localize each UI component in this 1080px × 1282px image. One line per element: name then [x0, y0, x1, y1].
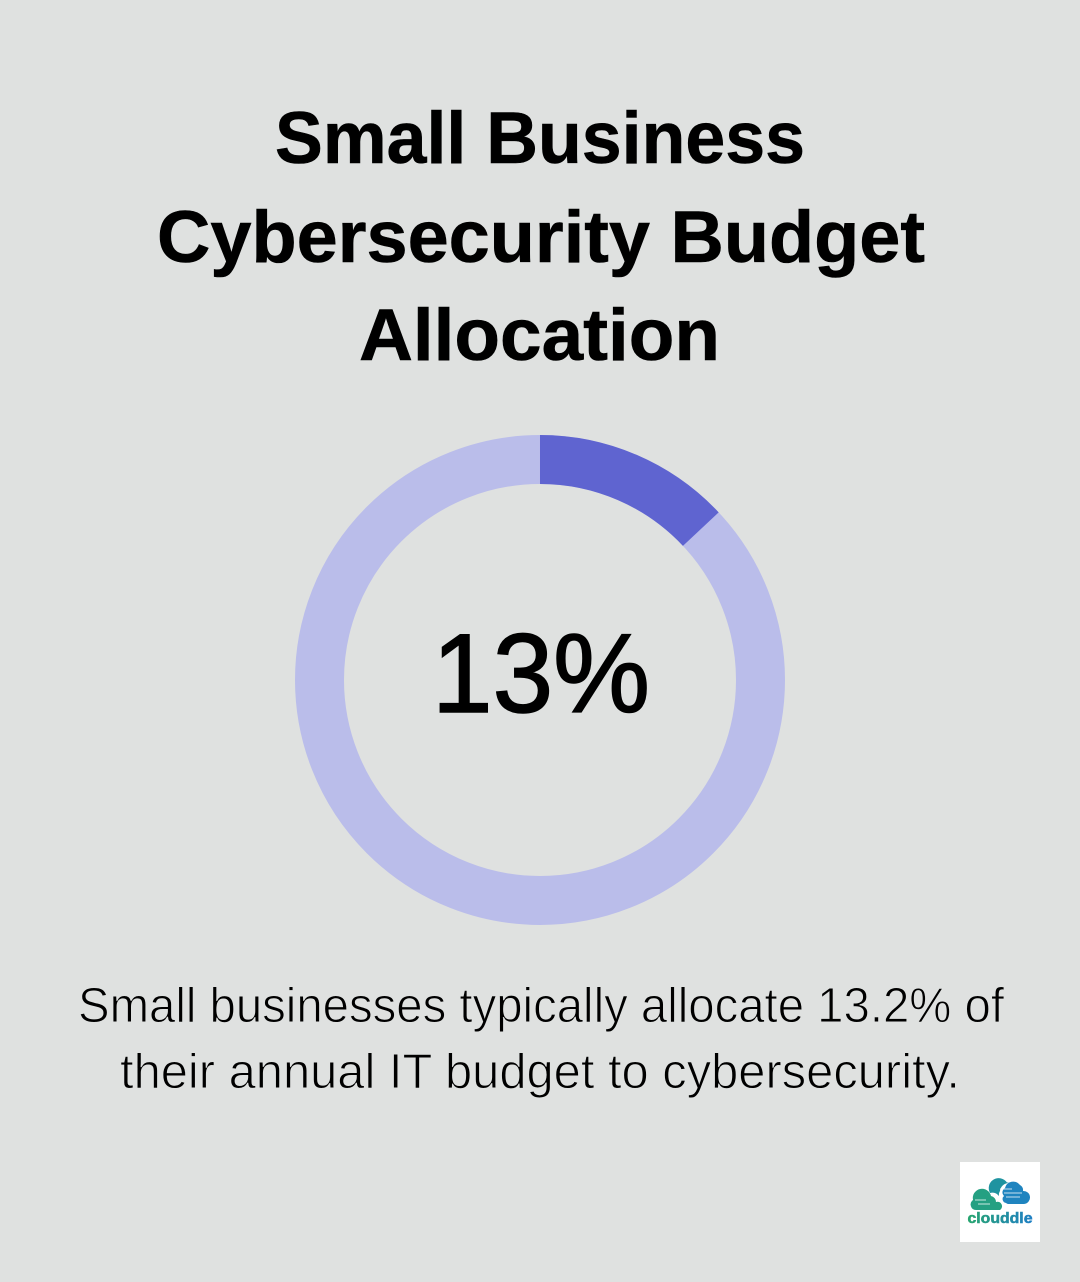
circuit lines: [975, 1189, 1022, 1204]
description text: Small businesses typically allocate 13.2% of: [78, 979, 1004, 1033]
title: Allocation: [359, 295, 720, 376]
title: Small Business: [275, 98, 805, 179]
title: [157, 98, 925, 376]
crescent: [989, 1178, 1009, 1196]
logo background: [960, 1162, 1040, 1242]
right cloud: [1002, 1182, 1030, 1204]
description text: [78, 979, 1004, 1099]
left cloud: [971, 1189, 1002, 1210]
logo wordmark: clouddle: [968, 1211, 1032, 1227]
logo icon: clouds: [971, 1178, 1030, 1210]
description text: their annual IT budget to cybersecurity.: [120, 1045, 960, 1099]
logo: clouddle: [960, 1162, 1040, 1242]
title: Cybersecurity Budget: [157, 197, 925, 278]
donut track: [320, 460, 760, 900]
donut highlighted segment: [540, 460, 701, 529]
donut chart: 13 percent: [320, 460, 760, 900]
donut center value: 13%: [432, 611, 650, 736]
